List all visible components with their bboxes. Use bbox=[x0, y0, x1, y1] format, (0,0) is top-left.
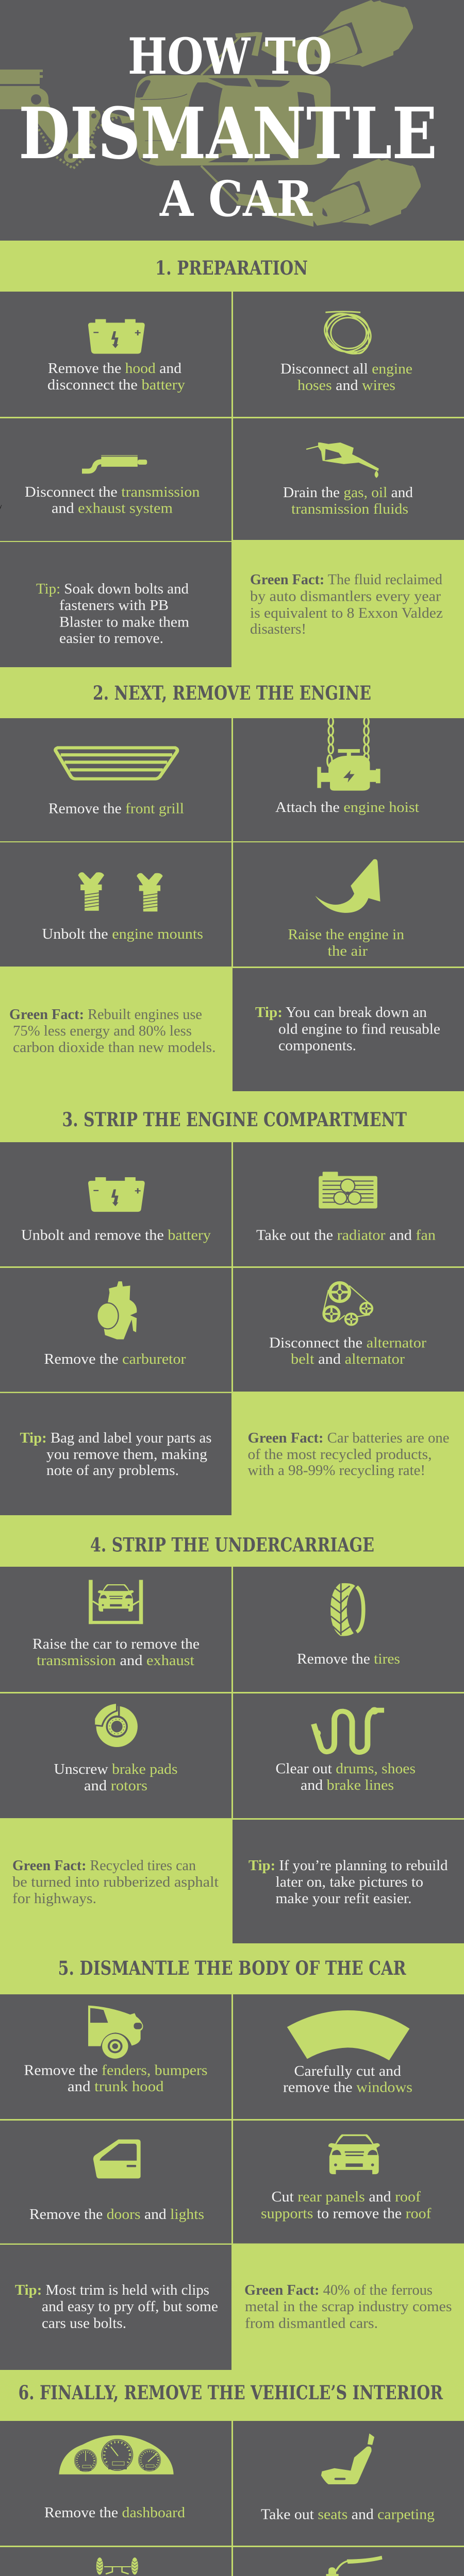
text: Take out the radiator and fan bbox=[256, 1227, 436, 1244]
panel: doors bbox=[0, 2121, 231, 2243]
text: Unbolt the engine mounts bbox=[42, 926, 203, 942]
text: Carefully cut and bbox=[294, 2063, 402, 2079]
panel: engine mounts bbox=[0, 842, 231, 967]
text bbox=[283, 2063, 412, 2096]
icon: up arrow bbox=[315, 859, 380, 913]
panel: section 1 preparation bbox=[0, 257, 464, 667]
icon: windshield bbox=[287, 2010, 409, 2060]
panel: green fact: by auto dismantlers every year bbox=[250, 588, 441, 605]
text bbox=[280, 361, 412, 394]
icon: car seat bbox=[321, 2433, 374, 2484]
panel: green fact: for highways. bbox=[12, 1890, 96, 1907]
text: Disconnect all engine bbox=[280, 361, 412, 377]
text: belt and alternator bbox=[291, 1351, 405, 1367]
text: Remove the fenders, bumpers bbox=[24, 2062, 207, 2078]
text bbox=[261, 2189, 432, 2222]
panel: tires bbox=[233, 1567, 464, 1692]
icon: car rear fender bbox=[88, 2006, 143, 2059]
panel: green fact bbox=[250, 571, 443, 637]
panel: drums and lines bbox=[233, 1693, 464, 1818]
text bbox=[15, 2282, 218, 2332]
text: remove the windows bbox=[283, 2079, 412, 2096]
panel: tip bbox=[233, 968, 464, 1091]
text: Tip: You can break down an bbox=[255, 1004, 427, 1021]
icon: brake line bbox=[313, 1707, 384, 1752]
panel: green fact: from dismantled cars. bbox=[245, 2315, 378, 2332]
icon: alternator belt bbox=[323, 1283, 372, 1325]
panel: green fact: Green Fact: 40% of the ferrous bbox=[244, 2282, 433, 2298]
text: Attach the engine hoist bbox=[275, 799, 419, 816]
icon: brake disc bbox=[94, 1703, 138, 1747]
icon: wires bbox=[319, 306, 377, 362]
text: old engine to find reusable bbox=[278, 1021, 440, 1038]
panel: engine hoist bbox=[233, 717, 464, 841]
text bbox=[36, 581, 189, 647]
title bbox=[19, 27, 437, 228]
text: Remove the front grill bbox=[48, 801, 184, 817]
panel: tip bbox=[233, 1820, 464, 1943]
panel: windows bbox=[233, 1994, 464, 2119]
text: Remove the hood and bbox=[48, 360, 182, 377]
text: Tip: Bag and label your parts as bbox=[20, 1430, 211, 1446]
icon: radiator bbox=[319, 1172, 377, 1209]
text: make your refit easier. bbox=[275, 1890, 411, 1907]
text: Disconnect the alternator bbox=[269, 1334, 426, 1351]
text: and easy to pry off, but some bbox=[42, 2298, 218, 2315]
panel: remove hood bbox=[0, 292, 231, 417]
panel: green fact: Green Fact: The fluid reclaimed bbox=[250, 571, 442, 588]
text: the air bbox=[328, 943, 368, 959]
panel: carburetor bbox=[0, 1268, 231, 1392]
icon: dashboard bbox=[59, 2435, 174, 2475]
text: easier to remove. bbox=[59, 630, 163, 647]
icon: grill bbox=[56, 748, 177, 779]
icon: fuel nozzle bbox=[306, 443, 379, 478]
icon: blowtorch bbox=[313, 2556, 383, 2576]
text: and trunk hood bbox=[68, 2078, 164, 2095]
icon: battery bbox=[88, 1177, 145, 1212]
panel: remove battery bbox=[0, 1142, 231, 1266]
panel: green fact bbox=[9, 1006, 216, 1056]
panel: green fact: metal in the scrap industry comes bbox=[245, 2298, 452, 2315]
panel: green fact: be turned into rubberized asphalt bbox=[12, 1874, 219, 1890]
panel: fenders bbox=[0, 1994, 231, 2119]
panel: green fact: disasters! bbox=[250, 621, 306, 637]
panel: tip bbox=[0, 1393, 231, 1515]
text: disconnect the battery bbox=[47, 377, 186, 393]
panel: tip bbox=[0, 542, 231, 667]
text bbox=[283, 484, 413, 517]
text bbox=[20, 1430, 211, 1479]
heading: step 4: 4. STRIP THE UNDERCARRIAGE bbox=[90, 1533, 374, 1556]
text: Remove the doors and lights bbox=[29, 2206, 204, 2223]
text: transmission and exhaust bbox=[37, 1652, 194, 1669]
text: transmission fluids bbox=[291, 501, 408, 517]
text bbox=[255, 1004, 440, 1054]
text bbox=[275, 1760, 416, 1793]
text: Unbolt and remove the battery bbox=[21, 1227, 211, 1244]
panel: chassis bbox=[0, 2547, 231, 2576]
panel: green fact bbox=[12, 1857, 219, 1907]
panel: green fact: Green Fact: Recycled tires can bbox=[12, 1857, 196, 1874]
panel: tip bbox=[0, 2245, 231, 2370]
text bbox=[47, 360, 186, 393]
text: Disconnect the transmission bbox=[25, 484, 200, 500]
panel: alternator bbox=[233, 1268, 464, 1392]
panel: green fact: 75% less energy and 80% less bbox=[13, 1023, 192, 1039]
icon: tire bbox=[330, 1583, 363, 1636]
panel: green fact: Green Fact: Rebuilt engines use bbox=[9, 1006, 202, 1023]
text: note of any problems. bbox=[46, 1462, 179, 1479]
panel: section 3 strip the engine compartment bbox=[0, 1108, 464, 1515]
text bbox=[248, 1857, 448, 1907]
panel: dashboard bbox=[0, 2421, 231, 2546]
icon: chassis bbox=[80, 2557, 154, 2576]
text: and rotors bbox=[84, 1777, 147, 1794]
panel: roof bbox=[233, 2121, 464, 2243]
icon: muffler bbox=[82, 455, 147, 471]
panel: green fact: with a 98-99% recycling rate! bbox=[247, 1462, 425, 1479]
icon: wing bolts bbox=[78, 872, 163, 911]
panel: section 5 dismantle the body bbox=[0, 1957, 464, 2370]
icon: carburetor bbox=[97, 1281, 137, 1340]
panel: raise engine bbox=[233, 842, 464, 967]
panel: green fact: of the most recycled products, bbox=[247, 1446, 432, 1463]
text: Tip: Soak down bolts and bbox=[36, 581, 189, 597]
text: and exhaust system bbox=[52, 500, 173, 516]
text: components. bbox=[278, 1038, 356, 1054]
text: cars use bolts. bbox=[42, 2315, 126, 2332]
text: Remove the tires bbox=[297, 1651, 400, 1667]
icon: car lift bbox=[89, 1580, 143, 1624]
panel: raise the car bbox=[0, 1567, 231, 1692]
panel: section 6 remove the interior bbox=[0, 2381, 464, 2576]
text bbox=[25, 484, 200, 516]
text: Drain the gas, oil and bbox=[283, 484, 413, 501]
text: Cut rear panels and roof bbox=[271, 2189, 421, 2205]
panel: green fact: Green Fact: Car batteries are one bbox=[247, 1430, 450, 1446]
panel: radiator and fan bbox=[233, 1142, 464, 1266]
top claw bbox=[261, 0, 413, 67]
panel: blowtorch bbox=[233, 2547, 464, 2576]
icon: engine hoist bbox=[317, 717, 380, 791]
panel: green fact: is equivalent to 8 Exxon Valdez bbox=[250, 605, 443, 621]
panel: seats bbox=[233, 2421, 464, 2546]
text: later on, take pictures to bbox=[275, 1874, 423, 1890]
panel: section 4 strip the undercarriage bbox=[0, 1533, 464, 1943]
text: supports to remove the roof bbox=[261, 2205, 432, 2222]
text bbox=[32, 1636, 200, 1669]
text: Tip: Most trim is held with clips bbox=[15, 2282, 209, 2298]
text bbox=[24, 2062, 207, 2095]
text: Remove the dashboard bbox=[44, 2504, 186, 2521]
lever arms bbox=[201, 32, 313, 227]
panel: brake pads bbox=[0, 1693, 231, 1818]
text bbox=[54, 1761, 177, 1794]
text: Clear out drums, shoes bbox=[275, 1760, 416, 1777]
text: you remove them, making bbox=[46, 1446, 207, 1463]
panel: drain fluids bbox=[233, 418, 464, 540]
heading: step 1: 1. PREPARATION bbox=[155, 257, 308, 279]
panel: hero banner bbox=[0, 0, 464, 241]
text: Remove the carburetor bbox=[44, 1351, 186, 1367]
icon: car door bbox=[93, 2140, 141, 2178]
text: and brake lines bbox=[301, 1777, 394, 1793]
illustration: dismantled car parts bbox=[0, 0, 421, 227]
text: Raise the car to remove the bbox=[32, 1636, 200, 1652]
title: A CAR bbox=[159, 171, 313, 228]
icon: car front bbox=[328, 2134, 380, 2174]
heading: step 2: 2. NEXT, REMOVE THE ENGINE bbox=[93, 682, 371, 704]
panel: section 2 remove the engine bbox=[0, 682, 464, 1091]
gears and belt bbox=[35, 109, 134, 168]
panel: front grill bbox=[0, 718, 231, 841]
text: hoses and wires bbox=[297, 377, 395, 394]
car body bbox=[134, 75, 330, 166]
text: Unscrew brake pads bbox=[54, 1761, 177, 1777]
bottom claw bbox=[313, 159, 421, 226]
text bbox=[269, 1334, 426, 1367]
text: fasteners with PB bbox=[59, 597, 169, 614]
text: Tip: If you’re planning to rebuild bbox=[248, 1857, 448, 1874]
piston bbox=[0, 70, 70, 152]
panel: green fact: carbon dioxide than new models. bbox=[13, 1039, 216, 1056]
panel: disconnect hoses bbox=[233, 292, 464, 417]
panel: transmission and exhaust bbox=[0, 418, 231, 541]
text bbox=[288, 926, 405, 959]
text: Blaster to make them bbox=[59, 614, 189, 631]
icon: battery bbox=[88, 319, 145, 354]
text: Raise the engine in bbox=[288, 926, 405, 943]
panel: green fact bbox=[244, 2282, 452, 2332]
title: HOW TO bbox=[128, 27, 332, 86]
text: Take out seats and carpeting bbox=[261, 2506, 435, 2522]
panel: green fact bbox=[247, 1430, 450, 1479]
